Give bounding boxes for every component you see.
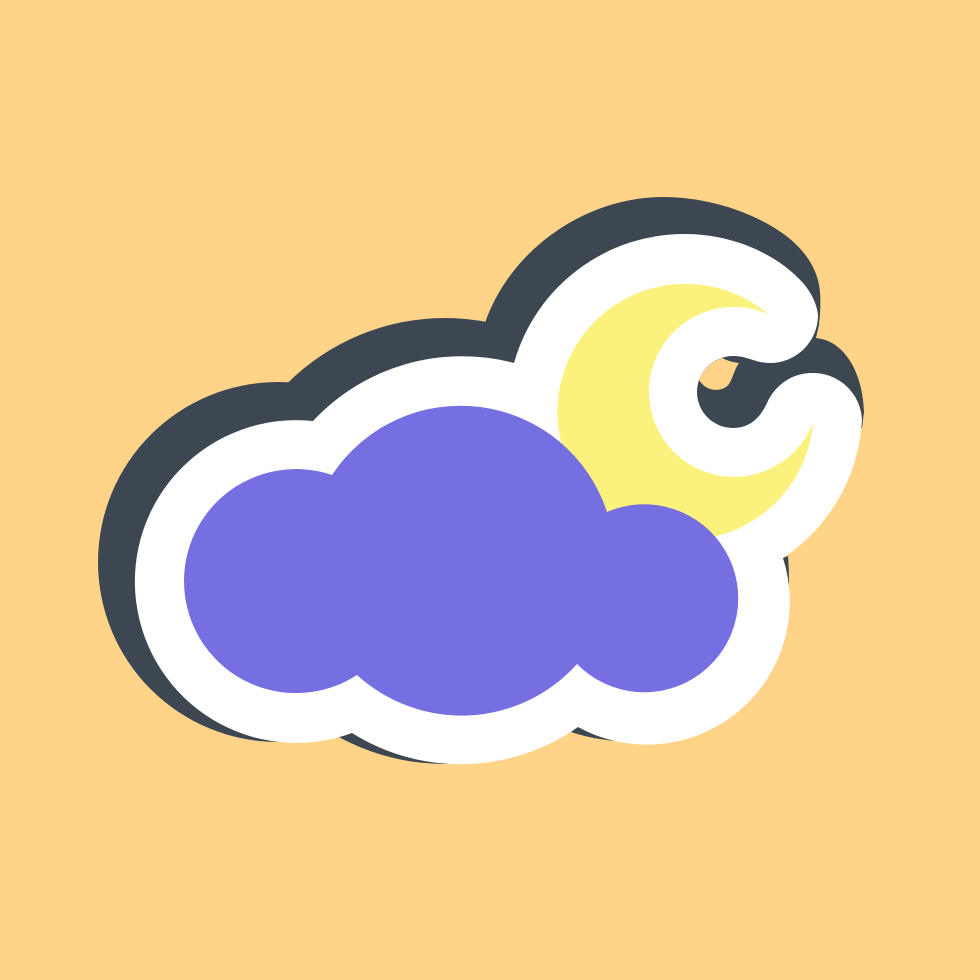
crescent moon xyxy=(557,284,813,540)
hole showing background xyxy=(699,358,739,390)
cloud xyxy=(184,406,738,716)
sticker white outline xyxy=(135,234,862,764)
sticker shadow xyxy=(98,197,864,764)
